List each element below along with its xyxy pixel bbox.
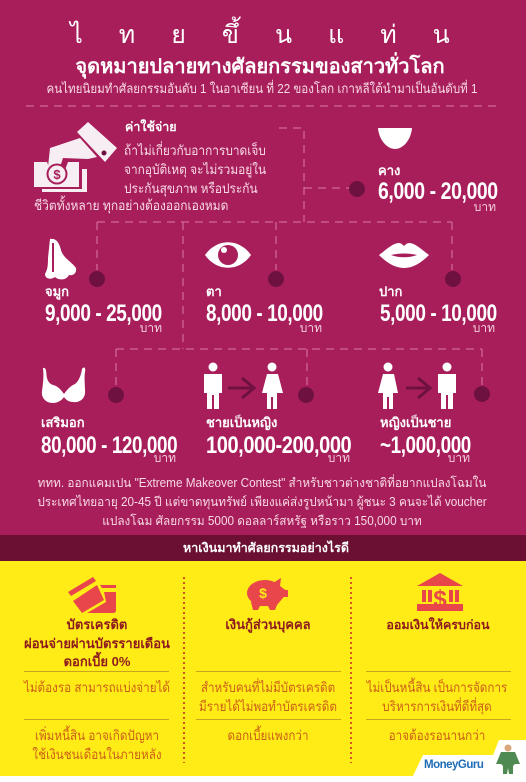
contest paragraph: ประเทศไทยอายุ 20-45 ปี แต่ขาดทุนทรัพย์ เพียงแค่ส่งรูปหน้ามา ผู้ชนะ 3 คนจะได้ voucher: [37, 495, 487, 509]
chin label: คาง: [378, 163, 400, 178]
eye unit: บาท: [300, 321, 322, 335]
icon: piggy bank: [247, 578, 288, 610]
icon: woman to man: [378, 362, 456, 409]
eye price: 8,000 - 10,000: [206, 300, 323, 327]
savings heading: ออมเงินให้ครบก่อน: [386, 618, 490, 632]
logo text: MoneyGuru: [424, 759, 483, 771]
intro line: คนไทยนิยมทำศัลยกรรมอันดับ 1 ในอาเซียน ที่ 22 ของโลก เกาหลีใต้นำมาเป็นอันดับที่ 1: [47, 81, 477, 96]
bottom white area with logo: [0, 740, 526, 782]
nose unit: บาท: [140, 321, 162, 335]
male to female price: 100,000-200,000: [206, 432, 351, 459]
icon: nose: [45, 238, 76, 280]
savings pro: [366, 678, 507, 714]
loan pro: [199, 678, 337, 714]
icon: chin: [378, 128, 412, 149]
bra unit: บาท: [154, 451, 176, 465]
icon: man to woman: [204, 362, 283, 409]
cost heading: ค่าใช้จ่าย: [125, 120, 177, 134]
female to male label: หญิงเป็นชาย: [380, 415, 451, 430]
dotted dividers: [183, 577, 352, 763]
female to male price: ~1,000,000: [380, 432, 471, 459]
icon: bra: [42, 368, 86, 403]
icon: lips: [379, 243, 429, 268]
chin price: 6,000 - 20,000: [378, 178, 498, 205]
card heading: บัตรเครดิต: [67, 617, 127, 632]
lips label: ปาก: [379, 284, 402, 299]
contest paragraph: แปลงโฉม ศัลยกรรม 5000 ดอลลาร์สหรัฐ หรือราว 150,000 บาท: [102, 514, 422, 528]
bra price: 80,000 - 120,000: [41, 432, 177, 459]
card pro: ไม่ต้องรอ สามารถแบ่งจ่ายได้: [24, 680, 170, 695]
nose price: 9,000 - 25,000: [45, 300, 162, 327]
dot: woman to man: [474, 386, 490, 402]
card con: ใช้เงินชนเดือนในภายหลัง: [32, 747, 162, 762]
nose label: จมูก: [45, 284, 69, 299]
icon: credit cards: [68, 577, 116, 613]
loan con: ดอกเบี้ยแพงกว่า: [227, 728, 309, 743]
white logo backing: [0, 740, 526, 782]
cost text: จากอุบัติเหตุ จะไม่รวมอยู่ใน: [124, 162, 266, 177]
contest paragraph: ททท. ออกแคมเปน "Extreme Makeover Contest" สำหรับชาวต่างชาติที่อยากแปลงโฉมใน: [38, 476, 486, 490]
male to female unit: บาท: [328, 451, 350, 465]
female to male unit: บาท: [448, 451, 470, 465]
card heading: ผ่อนจ่ายผ่านบัตรรายเดือน: [24, 636, 170, 650]
dot: eye: [268, 271, 284, 287]
dot: bra: [108, 387, 124, 403]
dot: chin: [349, 181, 365, 197]
section band: หาเงินมาทำศัลยกรรมอย่างไรดี: [183, 541, 349, 555]
savings pro: ไม่เป็นหนี้สิน เป็นการจัดการ: [367, 680, 507, 695]
savings con: อาจต้องรอนานกว่า: [389, 728, 485, 743]
icon: bank: $: [433, 586, 447, 613]
panel: yellow financing: [0, 561, 526, 782]
male to female label: ชายเป็นหญิง: [206, 415, 277, 430]
chin unit: บาท: [474, 200, 496, 214]
title line: spaced: ไทยขึ้นแท่น: [70, 21, 486, 49]
dot: nose: [89, 271, 105, 287]
cost text: ประกันสุขภาพ หรือประกัน: [124, 181, 258, 196]
card heading: ดอกเบี้ย 0%: [64, 654, 130, 669]
icon: eye: [205, 242, 251, 268]
cost text: [124, 141, 266, 196]
card con: เพิ่มหนี้สิน อาจเกิดปัญหา: [35, 728, 159, 743]
card heading: [24, 617, 170, 669]
cost text: ถ้าไม่เกี่ยวกับอาการบาดเจ็บ: [124, 143, 266, 158]
lips price: 5,000 - 10,000: [380, 300, 497, 327]
loan pro: สำหรับคนที่ไม่มีบัตรเครดิต: [201, 680, 335, 695]
logo mascot: [496, 744, 520, 774]
bra label: เสริมอก: [41, 415, 85, 430]
loan heading: เงินกู้ส่วนบุคคล: [225, 617, 311, 632]
card con: [32, 726, 162, 762]
dot: man to woman: [298, 387, 314, 403]
icon: bank: [417, 573, 463, 613]
contest paragraph: [37, 474, 487, 528]
loan pro: มีรายได้ไม่พอทำบัตรเครดิต: [199, 699, 337, 714]
column rules: [24, 671, 511, 720]
icon: piggy bank: $: [259, 585, 267, 601]
eye label: ตา: [206, 284, 222, 299]
subtitle: จุดหมายปลายทางศัลยกรรมของสาวทั่วโลก: [75, 56, 445, 78]
dot: lips: [445, 271, 461, 287]
icon: hand with money: $: [53, 167, 61, 182]
cost text last line: ชีวิตทั้งหลาย ทุกอย่างต้องออกเองหมด: [34, 198, 228, 213]
lips unit: บาท: [473, 321, 495, 335]
savings pro: บริหารการเงินที่ดีที่สุด: [382, 699, 492, 714]
icon: hand with money: [34, 122, 117, 192]
section band: [0, 535, 526, 561]
